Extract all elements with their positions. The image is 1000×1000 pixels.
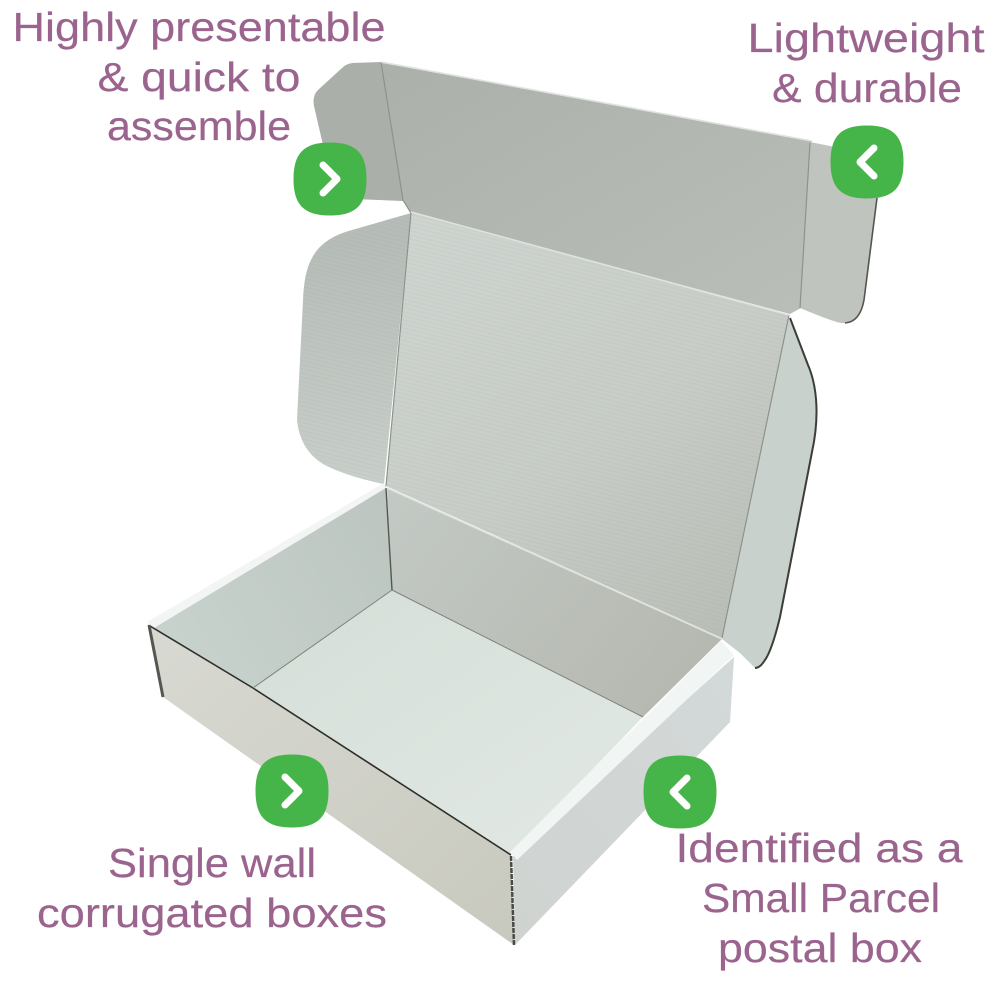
icon: green left chevron top right	[830, 126, 904, 198]
callout: highly presentable: assemble	[107, 103, 291, 149]
box right outer wall	[513, 657, 734, 945]
box left inner wall	[152, 486, 392, 688]
box back wall	[387, 488, 722, 717]
icon: green right chevron bottom left	[256, 754, 328, 828]
callout: single wall: corrugated boxes	[37, 890, 387, 936]
callout: small parcel: postal box	[718, 925, 923, 971]
callout: single wall	[37, 840, 387, 936]
callout: lightweight	[748, 15, 985, 111]
callout: single wall: Single wall	[108, 840, 316, 886]
callout: lightweight: & durable	[772, 65, 962, 111]
lid left wing	[297, 213, 411, 484]
box floor	[253, 590, 643, 855]
opened white corrugated box	[147, 62, 877, 945]
callout: highly presentable: Highly presentable	[12, 4, 386, 50]
icon: green right chevron top left	[294, 142, 366, 216]
callout: small parcel: Small Parcel	[702, 875, 940, 921]
lid main panel	[386, 212, 789, 638]
box right white rim	[510, 641, 734, 860]
lid top right flap	[800, 142, 877, 323]
lid right wing	[722, 316, 817, 668]
lid top centre flap	[381, 62, 812, 314]
callout: small parcel	[676, 825, 963, 971]
callout: lightweight: Lightweight	[748, 15, 985, 61]
box left white rim	[147, 483, 386, 628]
icon: green left chevron bottom right	[644, 756, 716, 828]
callout: highly presentable: & quick to	[98, 54, 300, 100]
box front wall	[148, 624, 514, 945]
lid top left flap	[314, 62, 403, 201]
callout: highly presentable	[12, 4, 386, 149]
callout: small parcel: Identified as a	[676, 825, 963, 871]
